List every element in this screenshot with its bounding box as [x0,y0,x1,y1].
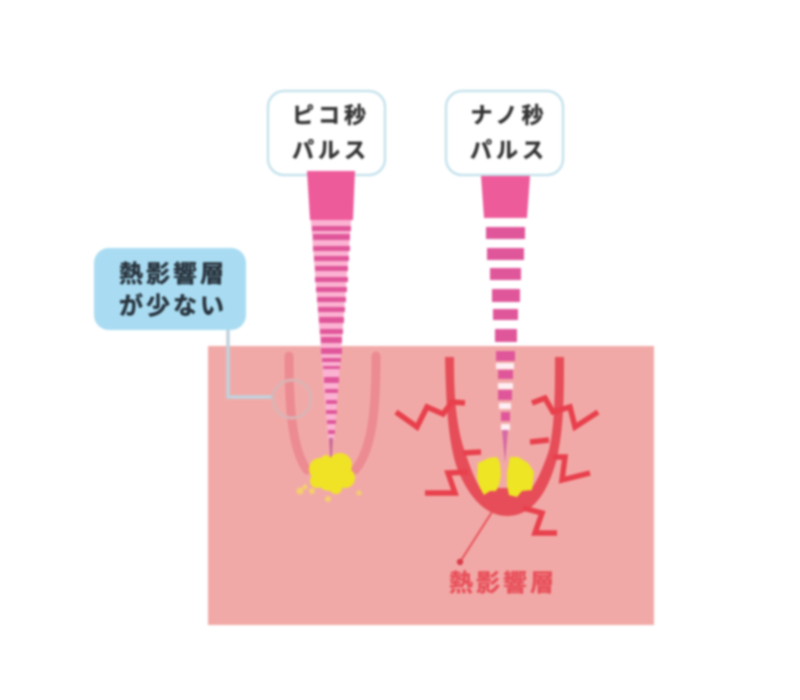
callout circle [273,380,311,418]
label box: nanosecond pulse [446,91,563,175]
callout: less heat-affected layer: 熱影響層 [119,261,227,288]
callout: less heat-affected layer [94,248,246,330]
nanosecond yellow target [477,457,534,497]
label box: picosecond pulse [268,91,385,175]
heat-affected layer label: 熱影響層 [449,570,557,597]
nanosecond pulse beam [481,176,530,463]
callout leader line [228,328,273,397]
label box: nanosecond pulse: パルス [470,138,548,163]
label box: picosecond pulse: ピコ秒 [292,103,370,128]
picosecond pulse beam [307,171,355,470]
label box: nanosecond pulse: ナノ秒 [471,103,547,128]
nanosecond vessels [396,357,598,533]
picosecond yellow target [296,453,362,502]
callout: less heat-affected layer: が少ない [119,292,227,320]
label box: picosecond pulse: パルス [292,138,370,163]
picosecond follicle [289,356,376,470]
skin panel [208,346,654,625]
heat-affected layer pointer [457,512,492,565]
